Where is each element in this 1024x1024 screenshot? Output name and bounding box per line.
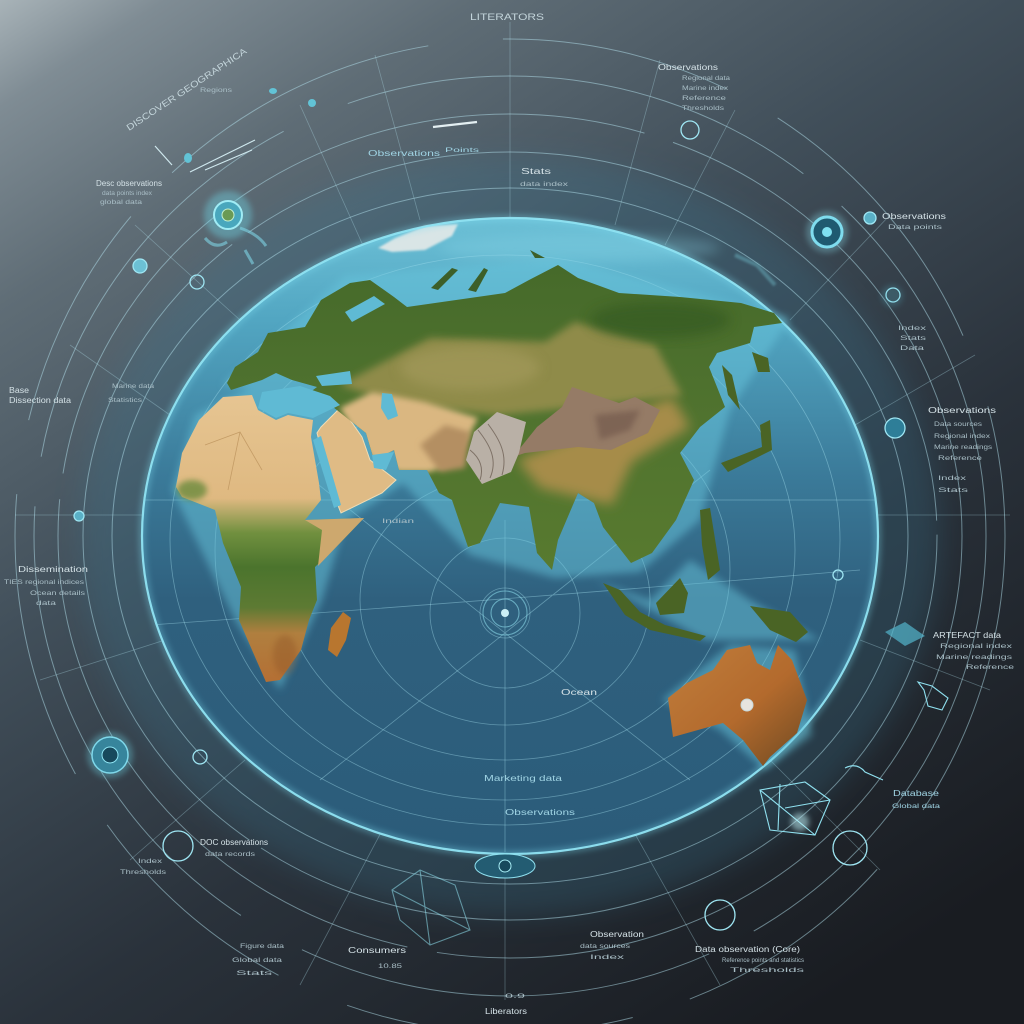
label: bottom right: Reference points and statistics xyxy=(722,957,805,964)
globe rim xyxy=(142,218,878,854)
label: right list: Observations xyxy=(928,406,996,415)
terrain shading xyxy=(340,302,730,505)
label: upper left: global data xyxy=(100,199,142,206)
label: bottom center: 0.9 xyxy=(505,993,526,1000)
label: upper right: Observations xyxy=(882,212,946,221)
label: upper right: Data points xyxy=(888,224,943,231)
label: right lower: ARTEFACT data xyxy=(933,631,1002,640)
label: left xyxy=(9,383,154,405)
label: top right list: Regional data xyxy=(682,75,730,82)
label: right list: Data sources xyxy=(934,421,983,428)
icon: right swirl xyxy=(885,622,925,646)
label: right upper xyxy=(898,325,927,352)
globe ocean xyxy=(142,218,878,854)
icon: lower right link xyxy=(845,766,883,780)
map: Madagascar xyxy=(328,612,351,657)
coastal glow xyxy=(172,258,820,770)
curved heading: DISCOVER GEOGRAPHICA xyxy=(125,46,249,133)
label: bottom left: Index xyxy=(138,858,163,865)
label: bottom: Consumers xyxy=(348,946,406,955)
label: bottom: Global data xyxy=(232,957,283,964)
label: right list: Reference xyxy=(938,455,983,462)
label: upper left xyxy=(96,179,162,206)
north ocean highlight xyxy=(440,234,720,262)
label: bottom center: Liberators xyxy=(485,1007,527,1016)
label: right lower: Regional index xyxy=(940,643,1013,650)
connector accent xyxy=(433,122,477,127)
icon: wireframe cube xyxy=(760,782,830,835)
label: upper right xyxy=(882,212,946,231)
label: right upper: Index xyxy=(898,325,927,332)
label: upper left: data points index xyxy=(102,190,153,197)
map: Arctic islands xyxy=(431,250,545,292)
label: upper center: data index xyxy=(520,181,569,188)
map: Arabia xyxy=(317,407,396,513)
icon: Australia marker xyxy=(741,699,753,711)
label: bottom left: Thresholds xyxy=(120,869,167,876)
label: ocean: Ocean xyxy=(561,688,597,697)
label: right list: Index xyxy=(938,475,967,482)
label: left: Base xyxy=(9,386,30,395)
map: Africa xyxy=(176,395,364,682)
label: lower left: data xyxy=(36,600,57,607)
label: lower right: Global data xyxy=(892,803,941,810)
south Africa shading xyxy=(273,635,297,675)
label: right lower: Marine readings xyxy=(936,654,1013,661)
icon: bottom lens xyxy=(475,854,535,878)
label: top right list: Reference xyxy=(682,95,727,102)
label: bottom: Stats xyxy=(236,970,274,977)
label: bottom xyxy=(232,943,406,977)
label: bottom: Figure data xyxy=(240,943,285,950)
label: lower left: Ocean details xyxy=(30,590,86,597)
label: top right list: Marine index xyxy=(682,85,729,92)
label: top right list: Observations xyxy=(658,63,718,72)
label: upper center left: Points xyxy=(445,147,480,154)
blue halo around globe xyxy=(80,156,940,916)
icon: cyan target top left xyxy=(204,191,266,264)
label: upper center: Stats xyxy=(521,167,551,176)
label: bottom right xyxy=(695,945,806,974)
label: right lower: Reference xyxy=(966,664,1015,671)
label: bottom left: data records xyxy=(205,851,256,858)
label: upper center left: Observations xyxy=(368,149,440,158)
icon: top left markers xyxy=(184,88,316,163)
horn of Africa tan xyxy=(305,518,364,566)
label: left: Marine data xyxy=(112,383,154,390)
label: lower right: Database xyxy=(893,789,940,798)
label: upper center xyxy=(520,167,569,188)
label: upper center left xyxy=(368,147,480,158)
label: lower left xyxy=(4,565,88,607)
label: ocean center: Marketing data xyxy=(484,774,563,783)
label: top right list xyxy=(658,63,730,112)
arctic ice xyxy=(378,224,458,252)
map: inland seas xyxy=(258,296,398,508)
globe rim glow xyxy=(142,218,878,854)
label: right upper: Data xyxy=(900,345,925,352)
title: LITERATORS xyxy=(470,12,544,23)
map: Eurasia xyxy=(227,265,782,570)
map: south-east Asian islands xyxy=(603,352,808,642)
label: right list xyxy=(928,406,996,494)
icon: right capsule xyxy=(918,682,948,710)
label: bottom right: Thresholds xyxy=(730,967,806,974)
label: bottom center right: Observation xyxy=(590,930,644,939)
globe xyxy=(140,218,880,854)
label: right list: Stats xyxy=(938,487,970,494)
label: bottom center xyxy=(485,993,527,1016)
label: upper left: Desc observations xyxy=(96,179,162,188)
label: lower left: TIES regional indices xyxy=(4,579,85,586)
label: ocean center xyxy=(484,774,575,817)
icon: small nodes xyxy=(74,121,905,930)
label: indian ocean: Indian xyxy=(382,518,415,525)
label: lower left: Dissemination xyxy=(18,565,88,574)
label: left: Dissection data xyxy=(9,396,72,405)
icon: ocean target xyxy=(483,591,527,635)
label: bottom center right: Index xyxy=(590,954,626,961)
label: bottom center right: data sources xyxy=(580,943,631,950)
label: ocean center: Observations xyxy=(505,808,575,817)
icon: wireframe sphere xyxy=(392,870,470,945)
label: right list: Regional index xyxy=(934,433,991,440)
icon: cyan target bottom left xyxy=(87,732,133,778)
icon: cyan target top right xyxy=(806,211,848,253)
label: right upper: Stats xyxy=(900,335,927,342)
label: left: Statistics xyxy=(108,397,143,404)
sub heading: Regions xyxy=(200,87,233,94)
inner ocean grid xyxy=(140,255,880,852)
label: top right list: Thresholds xyxy=(682,105,725,112)
label: bottom: 10.85 xyxy=(378,963,403,970)
label: bottom left: DOC observations xyxy=(200,838,268,847)
label: right lower xyxy=(933,631,1015,671)
map: Australia xyxy=(668,645,807,766)
label: bottom center right xyxy=(580,930,644,961)
west African vegetation xyxy=(177,480,207,500)
label: bottom right: Data observation (Core) xyxy=(695,945,800,954)
label: lower right xyxy=(892,789,941,810)
connector accents top left xyxy=(155,140,255,172)
icon: top right cluster xyxy=(735,255,903,307)
label: bottom left xyxy=(120,838,268,876)
label: right list: Marine readings xyxy=(934,444,993,451)
